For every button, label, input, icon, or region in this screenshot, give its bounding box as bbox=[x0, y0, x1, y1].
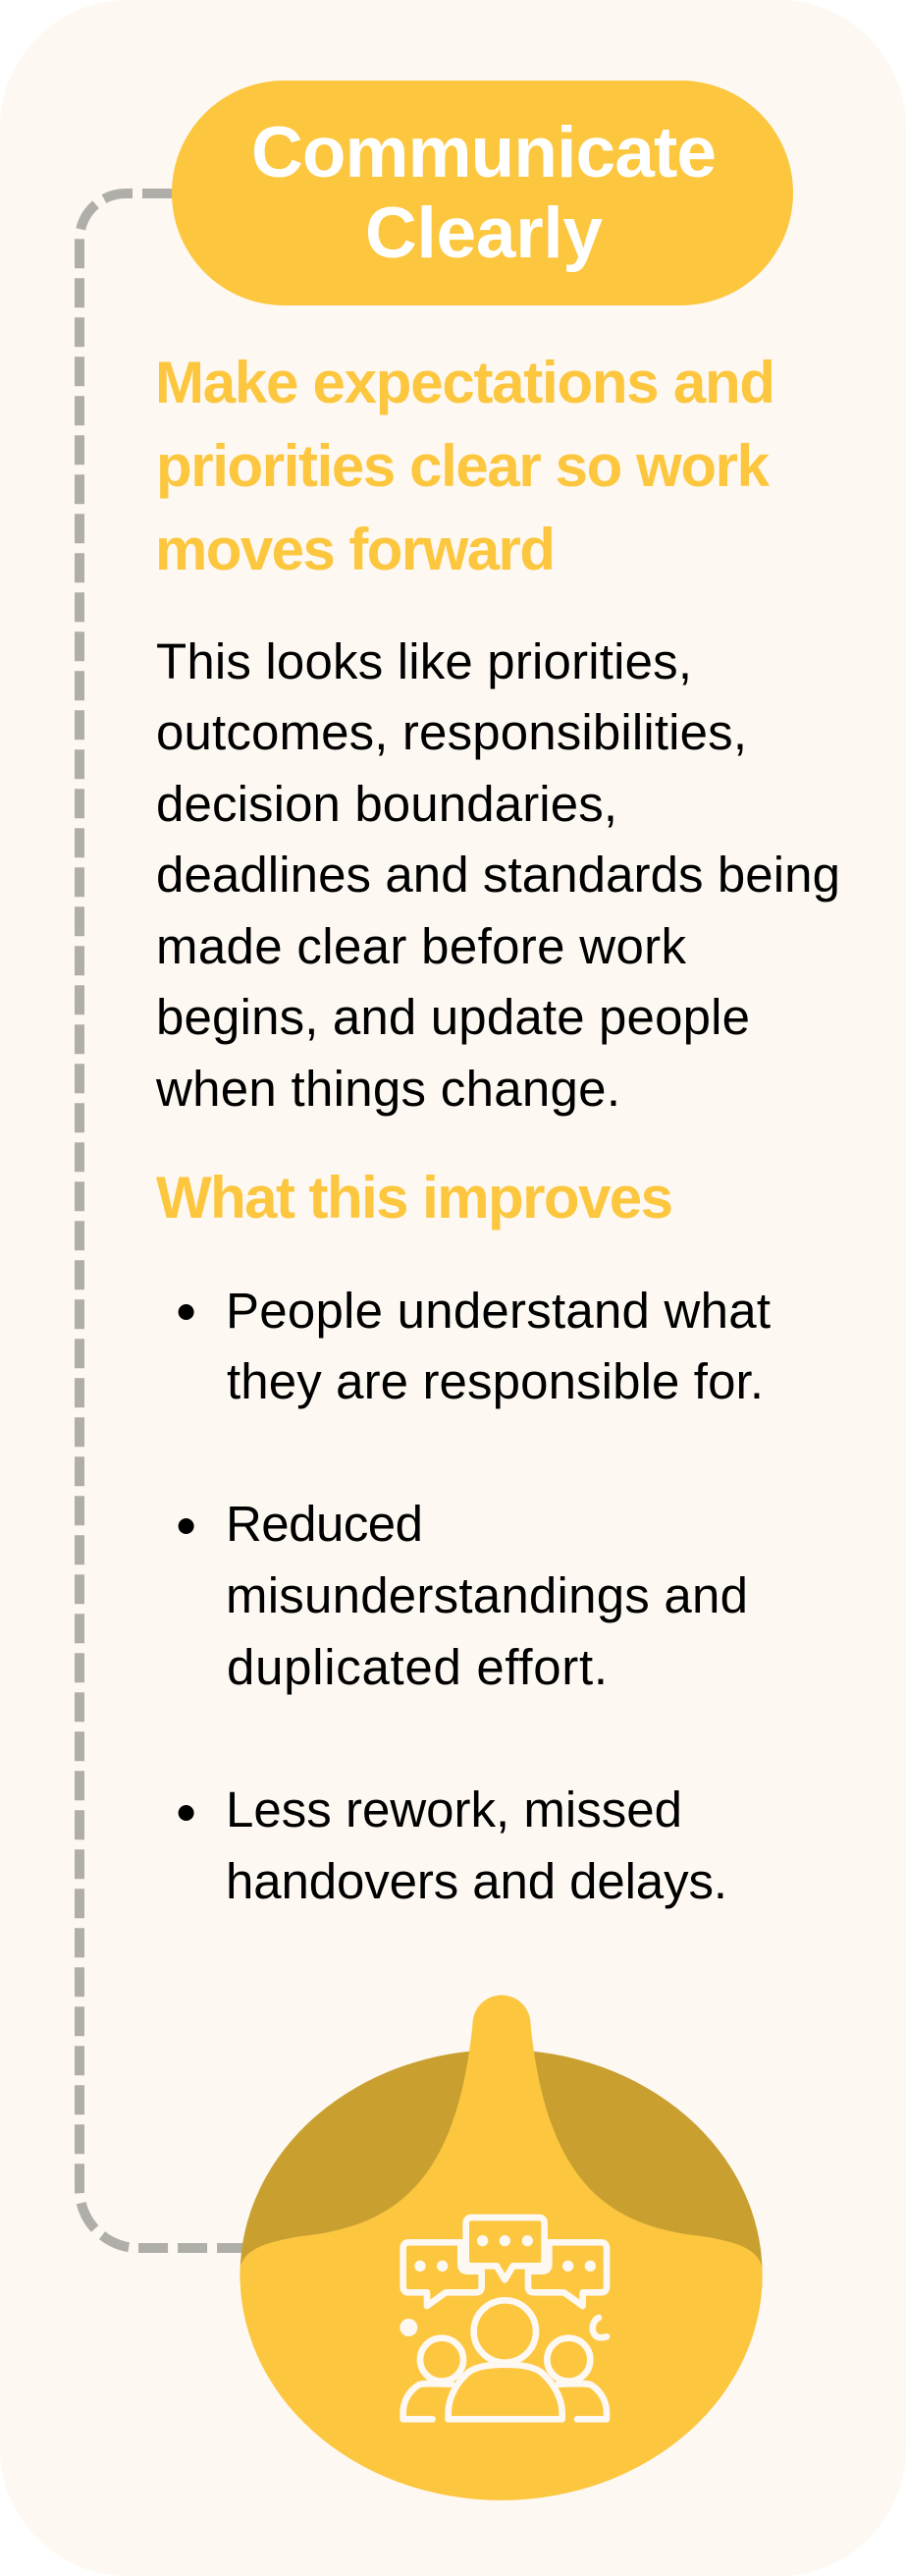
icon: people with speech bubbles bbox=[400, 2218, 607, 2419]
subheading: priorities clear so work bbox=[156, 433, 771, 499]
bullet 1: they are responsible for. bbox=[227, 1353, 764, 1409]
bullet 3 bbox=[179, 1781, 727, 1909]
icon: bubble joins bbox=[460, 2266, 549, 2273]
dashed connector line bbox=[80, 193, 255, 2248]
body paragraph: outcomes, responsibilities, bbox=[156, 704, 747, 760]
body paragraph bbox=[155, 633, 840, 1117]
bullet 1: People understand what bbox=[226, 1283, 771, 1339]
badge yellow drop shape bbox=[240, 1996, 763, 2500]
title text bbox=[251, 113, 717, 273]
bullet 3: Less rework, missed bbox=[226, 1781, 682, 1837]
bullet 1 bbox=[179, 1283, 771, 1409]
bullet 2 bbox=[179, 1496, 748, 1695]
body paragraph: decision boundaries, bbox=[156, 776, 617, 832]
icon: left person bbox=[403, 2338, 463, 2419]
title text: Clearly bbox=[365, 193, 603, 273]
body paragraph: This looks like priorities, bbox=[156, 633, 692, 689]
icon: speech dots bbox=[414, 2235, 596, 2272]
badge dark ellipse bbox=[240, 2050, 763, 2499]
bullet list bbox=[179, 1283, 771, 1909]
body paragraph: deadlines and standards being bbox=[156, 847, 840, 903]
bullet 3: handovers and delays. bbox=[226, 1853, 727, 1909]
icon: decorative dot bbox=[400, 2319, 417, 2336]
body paragraph: made clear before work bbox=[156, 918, 687, 974]
icon: centre person bbox=[449, 2300, 562, 2419]
title pill bbox=[172, 81, 793, 305]
icon: right speech bubble bbox=[528, 2242, 607, 2306]
subheading: moves forward bbox=[155, 517, 556, 582]
icon: decorative arc bbox=[593, 2318, 607, 2337]
bullet 2: misunderstandings and bbox=[226, 1567, 748, 1623]
title text: Communicate bbox=[251, 113, 717, 192]
icon: centre speech bubble bbox=[466, 2218, 545, 2279]
icon: left speech bubble bbox=[403, 2242, 482, 2306]
badge: drop on ellipse bbox=[240, 1996, 763, 2500]
body paragraph: when things change. bbox=[155, 1061, 620, 1117]
subheading bbox=[155, 350, 775, 582]
subheading: Make expectations and bbox=[155, 350, 775, 415]
bullet 2: Reduced bbox=[226, 1496, 423, 1552]
icon: right person bbox=[547, 2338, 607, 2419]
bullet 2: duplicated effort. bbox=[227, 1639, 608, 1695]
heading: what this improves: What this improves bbox=[156, 1165, 673, 1231]
body paragraph: begins, and update people bbox=[156, 989, 750, 1045]
